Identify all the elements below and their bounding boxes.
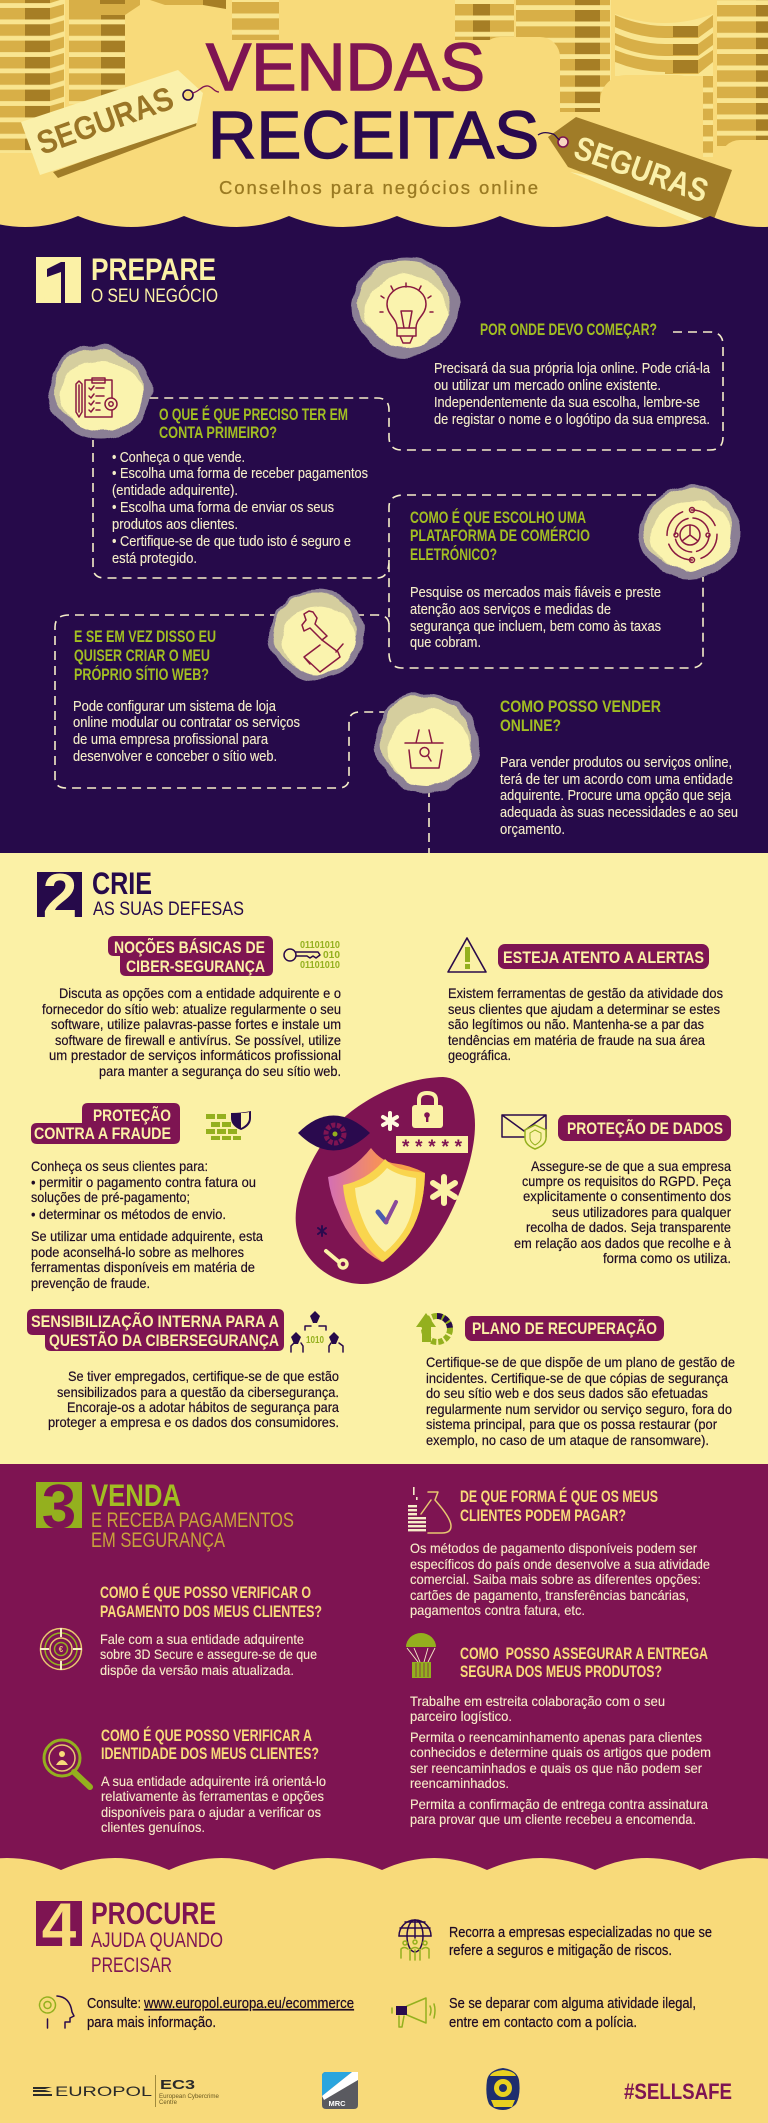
icon: warning triangle xyxy=(448,938,486,972)
icon: globe and people xyxy=(399,1920,431,1960)
heading and text: platform: COMO É QUE ESCOLHO UMA xyxy=(410,508,586,527)
text: recovery plan: sistema principal, para que os possa restaurar (por xyxy=(426,1416,717,1432)
pill: cybersecurity basics: NOÇÕES BÁSICAS DE xyxy=(114,937,265,957)
tag: right SEGURAS: SEGURAS xyxy=(570,129,713,210)
icon: platform xyxy=(640,486,740,578)
heading: sell: VENDA xyxy=(91,1477,181,1513)
logo: Europol EC3: European Cybercrime xyxy=(159,2093,219,2100)
heading and list: what do I need xyxy=(112,405,368,567)
heading and text: safe delivery: Permita a confirmação de entrega contra assinatura xyxy=(410,1796,708,1812)
panel: section 4 get help xyxy=(0,1858,768,2123)
logo: MRC: MRC xyxy=(328,2099,346,2108)
icon: light bulb xyxy=(353,258,459,356)
pill: alerts xyxy=(498,944,709,969)
heading and text: how to sell: COMO POSSO VENDER xyxy=(500,698,661,716)
heading and list: what do I need: CONTA PRIMEIRO? xyxy=(159,424,277,442)
text: recovery plan: regularmente num servidor ou serviço seguro, fora do xyxy=(426,1401,732,1417)
heading and text: platform: segurança que incluem, bem como às taxas xyxy=(410,619,661,635)
pill: fraud protection: PROTEÇÃO xyxy=(93,1105,171,1125)
heading and text: verify identity: A sua entidade adquirente irá orientá-lo xyxy=(101,1773,326,1789)
heading and text: platform: Pesquise os mercados mais fiáveis e preste xyxy=(410,585,661,601)
text: alerts xyxy=(448,985,723,1063)
number 2 block: 2 xyxy=(43,862,77,931)
heading and text: how to sell: adequada às suas necessidades e ao seu xyxy=(500,805,738,821)
icon: megaphone xyxy=(392,1998,435,2027)
pill: data protection xyxy=(558,1115,731,1141)
logo: police badge xyxy=(486,2068,520,2110)
text: specialised firms: refere a seguros e mitigação de riscos. xyxy=(449,1943,672,1959)
heading: sell: E RECEBA PAGAMENTOS xyxy=(91,1509,294,1532)
icon: money bag xyxy=(408,1487,451,1533)
heading and text: verify payment: Fale com a sua entidade adquirente xyxy=(100,1631,304,1647)
tag: left SEGURAS: SEGURAS xyxy=(32,79,178,162)
text: recovery plan: incidentes. Certifique-se de que cópias de segurança xyxy=(426,1370,728,1386)
title: VENDAS xyxy=(206,30,485,105)
heading and text: platform: que cobram. xyxy=(410,635,481,651)
heading and text: verify payment: sobre 3D Secure e assegure-se de que xyxy=(100,1646,317,1662)
heading: prepare: PREPARE xyxy=(91,251,216,287)
text: alerts: tendências em matéria de fraude na sua área xyxy=(448,1032,705,1048)
title: RECEITAS xyxy=(208,98,539,173)
icon: shield xyxy=(328,1148,425,1262)
number 1 block: 1 xyxy=(41,248,75,317)
heading and text: verify payment: dispõe da versão mais atualizada. xyxy=(100,1662,294,1678)
heading: get help xyxy=(91,1895,223,1977)
heading and text: where to start: Precisará da sua própria loja online. Pode criá-la xyxy=(434,361,710,377)
text: fraud protection: Conheça os seus clientes para: xyxy=(31,1158,208,1174)
heading and text: how clients pay: cartões de pagamento, transferências bancárias, xyxy=(410,1587,689,1603)
text: consult website: para mais informação. xyxy=(87,2015,216,2031)
text: alerts: Existem ferramentas de gestão da atividade dos xyxy=(448,985,723,1001)
heading and text: platform: ELETRÓNICO? xyxy=(410,545,497,564)
text: data protection xyxy=(514,1158,731,1266)
text: data protection: recolha de dados. Seja transparente xyxy=(526,1219,731,1235)
number 3 block: 3 xyxy=(42,1473,76,1542)
text: consult website: Consulte: xyxy=(87,1996,141,2012)
heading and text: own website: PRÓPRIO SÍTIO WEB? xyxy=(74,665,209,684)
icon: key xyxy=(326,1251,347,1268)
icon: magnifier xyxy=(44,1740,90,1787)
text: fraud protection: pode aconselhá-lo sobre as melhores xyxy=(31,1244,244,1260)
text: recovery plan: exemplo, no caso de um ataque de ransomware). xyxy=(426,1432,709,1448)
panel: section 2 defenses xyxy=(0,853,768,1465)
text: cybersecurity basics: Discuta as opções com a entidade adquirente e o xyxy=(59,985,341,1001)
heading and text: verify payment: PAGAMENTO DOS MEUS CLIENTES? xyxy=(100,1603,322,1621)
heading and text: where to start xyxy=(434,321,710,428)
heading and text: safe delivery: ser reencaminhados e quais os que não podem ser xyxy=(410,1760,702,1776)
heading: get help: PRECISAR xyxy=(91,1954,172,1977)
heading and text: how clients pay xyxy=(410,1487,710,1618)
icon: eye xyxy=(298,1116,370,1150)
heading and text: verify identity: IDENTIDADE DOS MEUS CLIENTES? xyxy=(101,1745,319,1763)
text: fraud protection: prevenção de fraude. xyxy=(31,1275,150,1291)
pill: data protection: PROTEÇÃO DE DADOS xyxy=(567,1118,723,1138)
panel: header xyxy=(0,0,768,240)
text: consult website: www.europol.europa.eu/ecommerce xyxy=(143,1996,354,2012)
heading and list: what do I need: • Escolha uma forma de receber pagamentos xyxy=(112,466,368,482)
icon: head with gear xyxy=(40,1996,74,2028)
heading and text: verify identity xyxy=(101,1726,326,1835)
text: contact police: entre em contacto com a polícia. xyxy=(449,2015,637,2031)
text: data protection: explicitamente o consentimento dos xyxy=(523,1188,731,1204)
icon: key and binary: 01101010 xyxy=(300,960,340,971)
heading and text: how clients pay: CLIENTES PODEM PAGAR? xyxy=(460,1507,626,1525)
heading and text: how to sell: Para vender produtos ou serviços online, xyxy=(500,755,732,771)
heading and text: safe delivery: reencaminhados. xyxy=(410,1775,509,1791)
heading and text: own website: QUISER CRIAR O MEU xyxy=(74,647,210,665)
pill: internal awareness xyxy=(27,1309,284,1351)
icon: people network xyxy=(291,1311,343,1352)
text: fraud protection: • permitir o pagamento contra fatura ou xyxy=(31,1174,256,1190)
text: consult website xyxy=(87,1996,354,2031)
heading and list: what do I need: O QUE É QUE PRECISO TER EM xyxy=(159,405,348,424)
text: contact police: Se se deparar com alguma atividade ilegal, xyxy=(449,1996,696,2012)
text: contact police xyxy=(449,1996,696,2031)
icon: people network: 1010 xyxy=(306,1335,324,1346)
heading and text: where to start: Independentemente da sua escolha, lembre-se xyxy=(434,395,700,411)
icon: parachute xyxy=(406,1633,436,1678)
icon: clipboard xyxy=(49,344,151,440)
text: internal awareness: sensibilizados para a questão da cibersegurança. xyxy=(57,1384,339,1400)
logo: Europol EC3: EUROPOL xyxy=(55,2083,152,2099)
text: data protection: forma como os utiliza. xyxy=(603,1250,731,1266)
text: recovery plan: do seu sítio web e dos seus dados são efetuadas xyxy=(426,1385,708,1401)
heading and text: safe delivery: Permita o reencaminhamento apenas para clientes xyxy=(410,1729,702,1745)
heading and text: safe delivery: SEGURA DOS MEUS PRODUTOS? xyxy=(460,1663,662,1681)
heading and text: platform: atenção aos serviços e medidas de xyxy=(410,602,611,618)
heading: sell xyxy=(91,1477,294,1552)
heading and text: how clients pay: DE QUE FORMA É QUE OS MEUS xyxy=(460,1487,658,1506)
tag: right SEGURAS xyxy=(538,117,732,224)
text: fraud protection: Se utilizar uma entidade adquirente, esta xyxy=(31,1228,263,1244)
logo: Europol EC3: Centre xyxy=(159,2099,177,2106)
heading and text: verify payment xyxy=(100,1583,322,1678)
icon: firewall xyxy=(206,1111,251,1140)
heading and text: platform xyxy=(410,508,661,651)
heading and text: how clients pay: específicos do país onde desenvolve a sua atividade xyxy=(410,1556,710,1572)
logo: Europol EC3 xyxy=(33,2075,219,2107)
icon: key and binary: 010 xyxy=(323,950,340,961)
heading and text: safe delivery: para provar que um cliente recebeu a encomenda. xyxy=(410,1811,696,1827)
text: data protection: Assegure-se de que a sua empresa xyxy=(531,1158,731,1174)
illustration: shield and security xyxy=(296,1077,475,1284)
heading and text: how to sell: adquirente. Procure uma opção que seja xyxy=(500,788,731,804)
panel: section 1 prepare xyxy=(0,216,768,860)
heading and text: where to start: POR ONDE DEVO COMEÇAR? xyxy=(480,321,657,339)
heading and text: safe delivery: conhecidos e determine quais os artigos que podem xyxy=(410,1744,711,1760)
icon: recovery xyxy=(416,1313,450,1342)
heading and text: how to sell xyxy=(500,698,738,838)
tag: left SEGURAS xyxy=(21,70,219,178)
heading: create defenses: AS SUAS DEFESAS xyxy=(93,899,244,920)
heading and list: what do I need: • Conheça o que vende. xyxy=(112,450,245,466)
heading and text: safe delivery: Trabalhe em estreita colaboração com o seu xyxy=(410,1693,665,1709)
text: recovery plan xyxy=(426,1354,735,1448)
pill: cybersecurity basics: CIBER-SEGURANÇA xyxy=(126,957,265,976)
heading and text: verify payment: COMO É QUE POSSO VERIFICAR O xyxy=(100,1583,311,1602)
text: alerts: são legítimos ou não. Mantenha-se a par das xyxy=(448,1016,704,1032)
panel: section 3 sell xyxy=(0,1464,768,1874)
icon: target euro: € xyxy=(59,1645,64,1654)
text: alerts: geográfica. xyxy=(448,1047,511,1063)
heading: prepare: O SEU NEGÓCIO xyxy=(91,285,218,307)
pill: alerts: ESTEJA ATENTO A ALERTAS xyxy=(503,948,704,967)
heading and text: how to sell: ONLINE? xyxy=(500,717,561,735)
text: internal awareness xyxy=(48,1368,339,1430)
heading and text: platform: PLATAFORMA DE COMÉRCIO xyxy=(410,526,590,545)
icon: lock xyxy=(412,1093,443,1128)
icon: envelope and shield xyxy=(502,1115,546,1149)
logo: MRC xyxy=(322,2072,358,2109)
heading and text: how to sell: orçamento. xyxy=(500,822,565,838)
heading and text: verify identity: relativamente às ferramentas e opções xyxy=(101,1788,324,1804)
icon: shopping basket xyxy=(375,693,479,793)
text: fraud protection: soluções de pré-pagamento; xyxy=(31,1189,190,1205)
text: fraud protection xyxy=(31,1158,263,1291)
dashed connectors xyxy=(55,332,723,860)
pill: fraud protection xyxy=(31,1103,180,1144)
heading and text: where to start: ou utilizar um mercado online existente. xyxy=(434,378,661,394)
heading and text: verify identity: clientes genuínos. xyxy=(101,1819,205,1835)
pill: internal awareness: SENSIBILIZAÇÃO INTERNA PARA A xyxy=(31,1311,279,1331)
hashtag: #SELLSAFE xyxy=(624,2079,732,2104)
heading and list: what do I need: (entidade adquirente). xyxy=(112,483,238,499)
heading and text: how to sell: terá de ter um acordo com uma entidade xyxy=(500,772,733,788)
heading and text: own website: E SE EM VEZ DISSO EU xyxy=(74,628,216,646)
heading and text: how clients pay: pagamentos contra fatura, etc. xyxy=(410,1602,585,1618)
subtitle: Conselhos para negócios online xyxy=(219,177,538,198)
heading: prepare xyxy=(91,251,218,307)
icon: key and binary xyxy=(284,940,340,971)
heading and text: how clients pay: comercial. Saiba mais sobre as diferentes opções: xyxy=(410,1571,701,1587)
heading: create defenses xyxy=(92,865,244,920)
heading and text: where to start: de registar o nome e o logótipo da sua empresa. xyxy=(434,412,710,428)
pill: cybersecurity basics xyxy=(108,936,273,976)
icon: wrench and hand xyxy=(269,591,365,679)
heading: get help: PROCURE xyxy=(91,1895,216,1931)
text: data protection: em relação aos dados que recolhe e à xyxy=(514,1235,731,1251)
heading and text: verify identity: disponíveis para o ajudar a verificar os xyxy=(101,1804,321,1820)
pill: recovery plan: PLANO DE RECUPERAÇÃO xyxy=(472,1318,657,1338)
text: specialised firms: Recorra a empresas especializadas no que se xyxy=(449,1925,712,1941)
text: cybersecurity basics: um prestador de serviços informáticos profissional xyxy=(49,1047,341,1063)
heading and text: own website xyxy=(73,628,300,765)
password field: ***** xyxy=(402,1137,463,1158)
heading and list: what do I need: produtos aos clientes. xyxy=(112,517,238,533)
heading: get help: AJUDA QUANDO xyxy=(91,1929,223,1952)
coin stacks background xyxy=(0,0,768,240)
heading and text: own website: de uma empresa profissional para xyxy=(73,732,268,748)
heading: create defenses: CRIE xyxy=(92,865,152,901)
text: cybersecurity basics xyxy=(42,985,341,1079)
text: recovery plan: Certifique-se de que dispõe de um plano de gestão de xyxy=(426,1354,735,1370)
icon: target euro xyxy=(40,1628,82,1670)
heading and list: what do I need: está protegido. xyxy=(112,551,197,567)
asterisks xyxy=(318,1113,455,1236)
heading and list: what do I need: • Escolha uma forma de enviar os seus xyxy=(112,500,334,516)
logo: Europol EC3: EC3 xyxy=(160,2077,195,2092)
text: data protection: cumpre os requisitos do RGPD. Peça xyxy=(522,1173,731,1189)
text: cybersecurity basics: fornecedor do sítio web: atualize regularmente o seu xyxy=(42,1001,341,1017)
pill: internal awareness: QUESTÃO DA CIBERSEGURANÇA xyxy=(49,1330,279,1350)
text: specialised firms xyxy=(449,1925,712,1959)
heading and text: verify identity: COMO É QUE POSSO VERIFICAR A xyxy=(101,1726,312,1745)
text: internal awareness: Encoraje-os a adotar hábitos de segurança para xyxy=(67,1399,339,1415)
pill: fraud protection: CONTRA A FRAUDE xyxy=(34,1124,171,1143)
text: cybersecurity basics: software, utilize palavras-passe fortes e instale um xyxy=(51,1016,341,1032)
text: fraud protection: ferramentas disponíveis em matéria de xyxy=(31,1259,255,1275)
heading and text: how clients pay: Os métodos de pagamento disponíveis podem ser xyxy=(410,1540,697,1556)
heading and text: safe delivery: parceiro logístico. xyxy=(410,1708,512,1724)
pill: recovery plan xyxy=(465,1316,664,1341)
text: fraud protection: • determinar os métodos de envio. xyxy=(31,1206,226,1222)
heading: sell: EM SEGURANÇA xyxy=(91,1529,225,1552)
text: cybersecurity basics: software de firewall e antivírus. Se possível, utilize xyxy=(55,1032,341,1048)
text: internal awareness: Se tiver empregados, certifique-se de que estão xyxy=(68,1368,339,1384)
heading and text: own website: desenvolver e conceber o sítio web. xyxy=(73,749,277,765)
text: cybersecurity basics: para manter a segurança do seu sítio web. xyxy=(99,1063,341,1079)
text: internal awareness: proteger a empresa e os dados dos consumidores. xyxy=(48,1414,339,1430)
text: data protection: seus utilizadores para qualquer xyxy=(552,1204,731,1220)
heading and text: own website: Pode configurar um sistema de loja xyxy=(73,699,276,715)
title xyxy=(206,30,539,173)
heading and text: safe delivery xyxy=(410,1645,711,1827)
icon: key and binary: 01101010 xyxy=(300,940,340,951)
text: alerts: seus clientes que ajudam a determinar se estes xyxy=(448,1001,720,1017)
heading and list: what do I need: • Certifique-se de que tudo isto é seguro e xyxy=(112,534,351,550)
number 4 block: 4 xyxy=(42,1891,77,1960)
heading and text: own website: online modular ou contratar os serviços xyxy=(73,715,300,731)
